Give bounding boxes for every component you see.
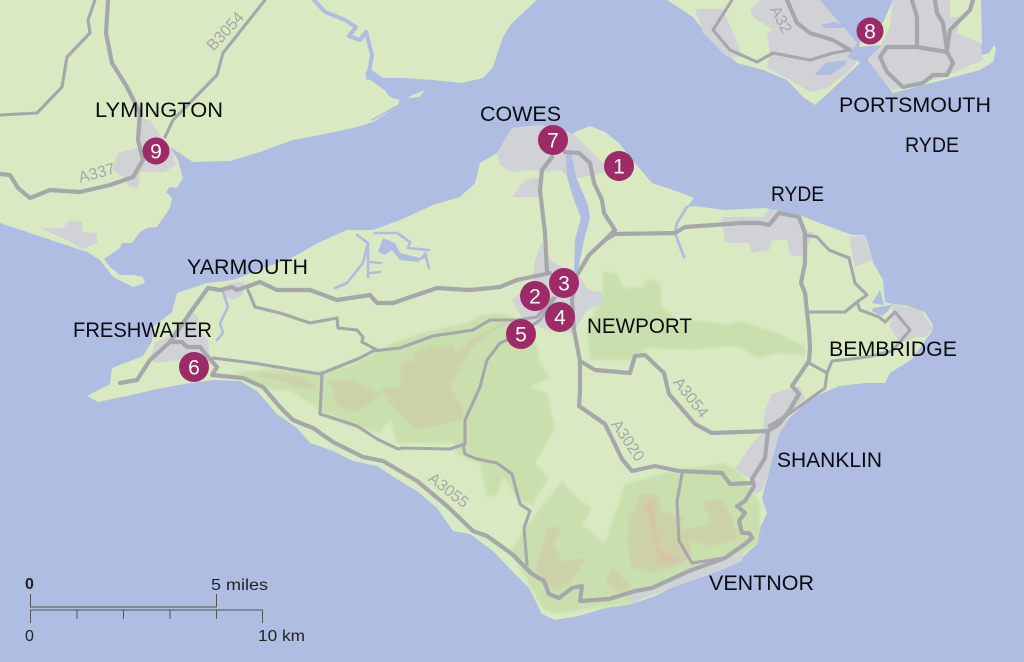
land: Isle of Wight	[87, 125, 933, 620]
numbered location markers: 8	[864, 20, 876, 44]
relief: low hills	[233, 272, 805, 614]
land: Portsea Island	[859, 0, 996, 93]
place names: BEMBRIDGE	[829, 338, 957, 361]
water: rivers and creeks	[217, 0, 893, 340]
place names: YARMOUTH	[187, 256, 308, 279]
land: mainland Hampshire west	[0, 0, 537, 287]
numbered location markers: 7	[547, 130, 559, 152]
land: Gosport peninsula	[667, 0, 860, 105]
road label: A337: A337	[77, 161, 117, 187]
numbered location markers: 1	[613, 156, 625, 178]
road label: A32: A32	[766, 3, 794, 37]
road label: A3055: A3055	[425, 470, 472, 512]
scale bar: 0	[25, 576, 34, 593]
relief: summit	[645, 501, 682, 563]
numbered location markers: 4	[554, 306, 566, 330]
place names: PORTSMOUTH	[839, 94, 991, 117]
numbered location markers	[142, 18, 884, 382]
scale bar: 0	[25, 628, 34, 645]
place names: RYDE	[771, 183, 824, 206]
scale bar: 10 km	[258, 628, 305, 645]
place names: VENTNOR	[709, 572, 814, 595]
scale bar	[25, 576, 305, 645]
road label: A3054: A3054	[669, 374, 711, 421]
road label: A3020: A3020	[607, 417, 647, 465]
place names: COWES	[480, 103, 561, 126]
scale bar: 5 miles	[211, 577, 268, 594]
numbered location markers: 9	[150, 140, 162, 164]
place names: LYMINGTON	[95, 99, 223, 122]
numbered location markers: 6	[188, 356, 200, 380]
numbered location markers: 2	[529, 286, 541, 308]
place names	[73, 94, 991, 595]
place names: FRESHWATER	[73, 319, 212, 342]
place names: SHANKLIN	[777, 449, 882, 472]
relief: high ground	[253, 322, 739, 593]
place names: RYDE	[905, 134, 959, 157]
numbered location markers: 3	[558, 272, 570, 296]
road label: B3054: B3054	[204, 9, 248, 55]
numbered location markers: 5	[515, 324, 527, 346]
place names: NEWPORT	[587, 315, 692, 338]
